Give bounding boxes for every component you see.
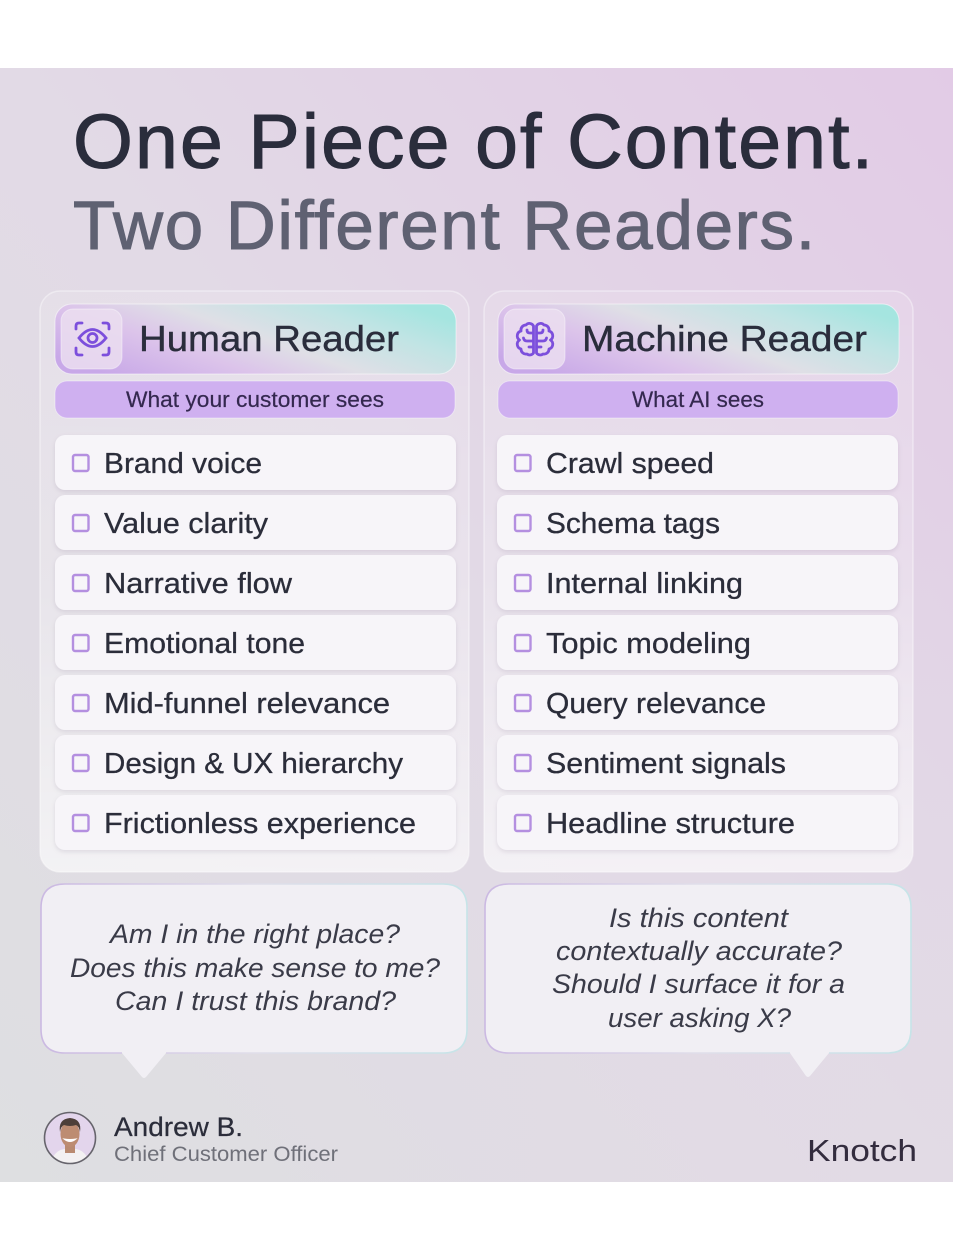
callout: machine questions: Should I surface it for a — [552, 969, 845, 999]
human header — [55, 304, 456, 374]
title: Two Different Readers. — [73, 187, 815, 264]
author name — [114, 1112, 338, 1166]
icon: eye — [76, 323, 109, 355]
row: frictionless experience — [55, 795, 456, 850]
row: value clarity: Value clarity — [104, 508, 269, 540]
callout: human questions: Am I in the right place? — [108, 919, 400, 949]
row: design and ux hierarchy — [55, 735, 456, 790]
row: sentiment signals — [497, 735, 898, 790]
row: internal linking: Internal linking — [546, 568, 743, 600]
row: query relevance — [497, 675, 898, 730]
logo: knotch: Knotch — [807, 1133, 917, 1168]
row: schema tags: Schema tags — [546, 508, 720, 540]
row: headline structure — [497, 795, 898, 850]
row: crawl speed — [497, 435, 898, 490]
row: design and ux hierarchy: Design & UX hierarchy — [104, 748, 404, 780]
row: schema tags — [497, 495, 898, 550]
row: mid-funnel relevance: Mid-funnel relevance — [104, 688, 390, 720]
title — [73, 99, 873, 264]
panel: human reader — [40, 291, 469, 872]
machine subtitle: What AI sees — [632, 387, 764, 412]
machine header: Machine Reader — [582, 318, 867, 359]
machine header — [498, 304, 899, 374]
row: brand voice — [55, 435, 456, 490]
title: One Piece of Content. — [73, 99, 873, 185]
callout: human questions: Can I trust this brand? — [115, 986, 396, 1016]
row: headline structure: Headline structure — [546, 808, 795, 840]
row: emotional tone — [55, 615, 456, 670]
avatar — [44, 1112, 96, 1164]
row: topic modeling — [497, 615, 898, 670]
row: sentiment signals: Sentiment signals — [546, 748, 786, 780]
row: narrative flow: Narrative flow — [104, 568, 293, 600]
row: brand voice: Brand voice — [104, 448, 262, 480]
callout: machine questions — [485, 884, 911, 1077]
callout: human questions — [41, 884, 467, 1078]
row: internal linking — [497, 555, 898, 610]
icon: brain — [517, 323, 553, 355]
machine subtitle — [498, 381, 898, 418]
author name: Chief Customer Officer — [114, 1143, 338, 1166]
author name: Andrew B. — [114, 1112, 243, 1142]
row: topic modeling: Topic modeling — [546, 628, 751, 660]
row: mid-funnel relevance — [55, 675, 456, 730]
row: query relevance: Query relevance — [546, 688, 766, 720]
human header: Human Reader — [139, 318, 399, 359]
row: crawl speed: Crawl speed — [546, 448, 714, 480]
callout: human questions: Does this make sense to me? — [70, 953, 440, 983]
row: frictionless experience: Frictionless experience — [104, 808, 416, 840]
human subtitle: What your customer sees — [126, 387, 384, 412]
panel: machine reader — [484, 291, 913, 872]
human subtitle — [55, 381, 455, 418]
row: emotional tone: Emotional tone — [104, 628, 305, 660]
callout: machine questions: user asking X? — [608, 1003, 791, 1033]
callout: machine questions: Is this content — [609, 903, 790, 933]
row: narrative flow — [55, 555, 456, 610]
callout: machine questions: contextually accurate? — [556, 936, 842, 966]
row: value clarity — [55, 495, 456, 550]
